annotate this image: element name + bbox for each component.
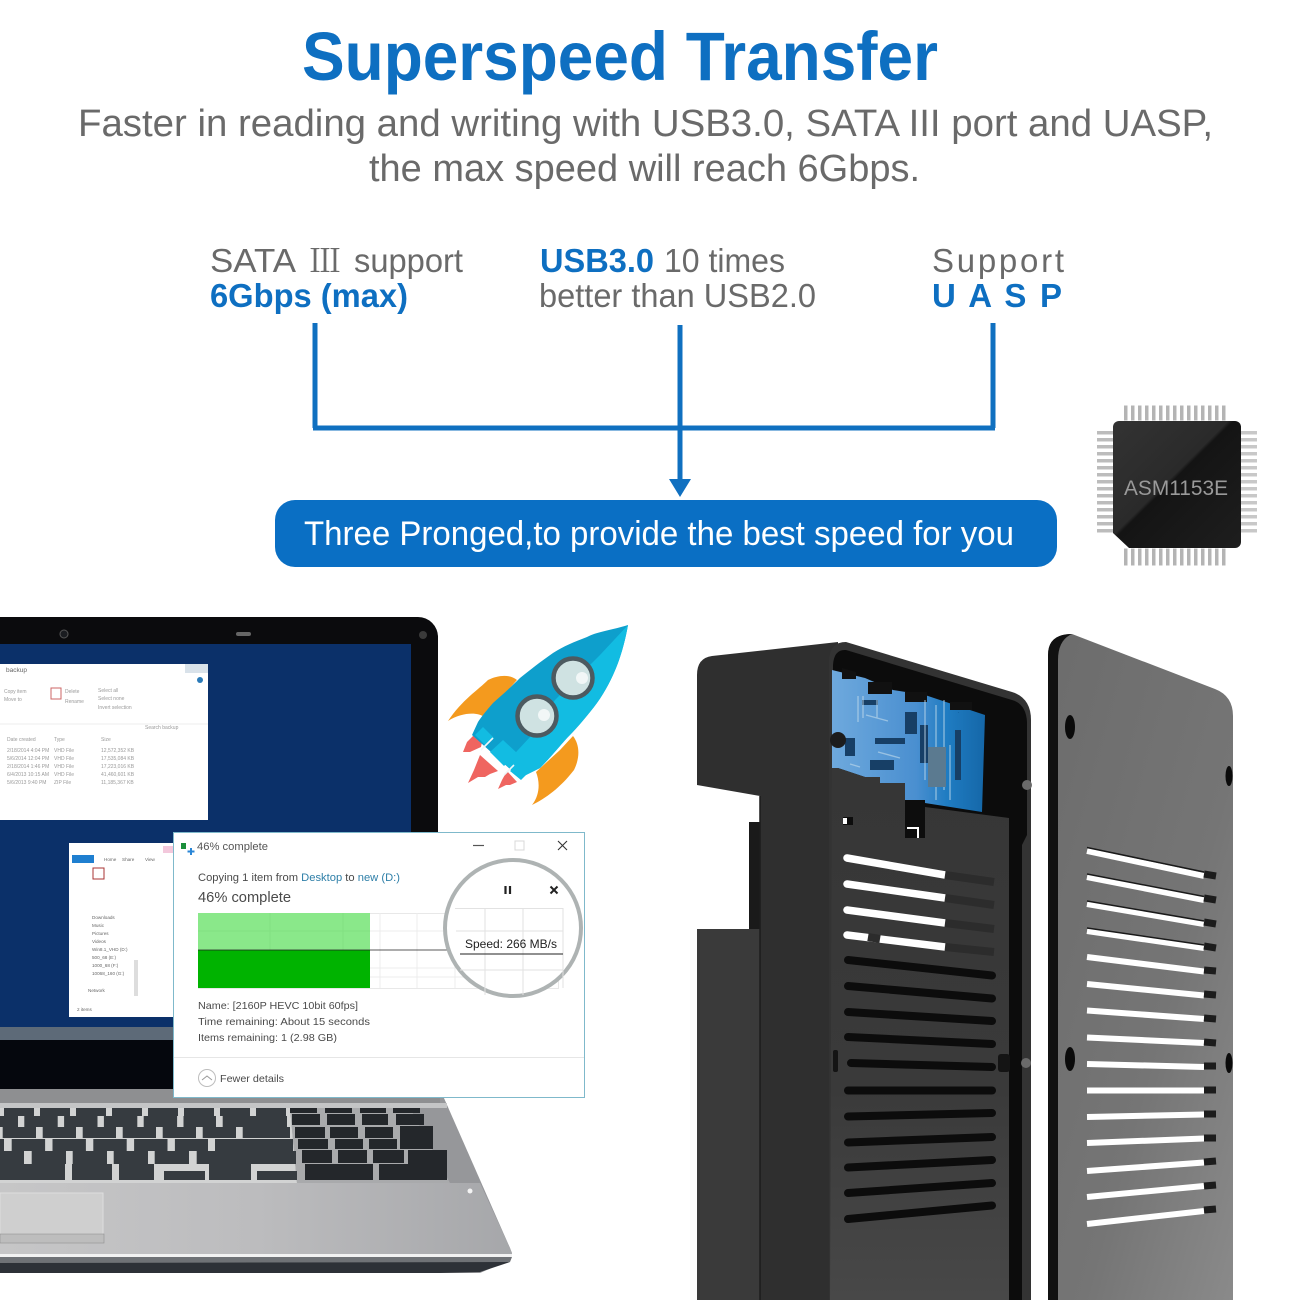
left fin	[448, 676, 517, 721]
file window: backup: 11,185,367 KB	[101, 780, 134, 786]
speed chart	[198, 913, 560, 988]
subtitle: Faster in reading and writing with USB3.0, SATA III port and UASP,	[78, 103, 1213, 145]
file window: backup: Date created	[7, 737, 36, 743]
file window: backup: Select all	[98, 688, 118, 694]
file window: backup: Search backup	[145, 725, 179, 731]
file window: drive list	[69, 843, 174, 1017]
file window: backup: 17,223,016 KB	[101, 764, 135, 770]
dialog status text: Copying 1 item from Desktop to new (D:)	[198, 872, 400, 884]
dialog title bar	[181, 841, 567, 855]
file window: backup: Rename	[65, 699, 84, 705]
file window: backup: Invert selection	[98, 705, 132, 711]
file window: backup: 17,535,084 KB	[101, 756, 135, 762]
file window: drive list: Videos	[92, 939, 107, 944]
laptop touchpad	[0, 1193, 104, 1243]
file window: drive list: 2 items	[77, 1007, 93, 1012]
file window: drive list: View	[145, 857, 156, 862]
file window: drive list: 1000_68 (F:)	[92, 963, 119, 968]
sliding inner panel	[830, 768, 1009, 1300]
callout banner	[275, 500, 1057, 567]
file window: drive list: Home	[104, 857, 117, 862]
file window: drive list: Win8.1_VHD (D:)	[92, 947, 128, 952]
transfer details: Items remaining: 1 (2.98 GB)	[198, 1032, 337, 1044]
subtitle: the max speed will reach 6Gbps.	[369, 148, 920, 190]
laptop numeric keypad	[290, 1108, 447, 1180]
file window: backup: ZIP File	[54, 780, 71, 786]
file window: backup: 5/6/2014 12:04 PM	[7, 756, 49, 762]
fewer details control: Fewer details	[220, 1073, 284, 1085]
feature: SATA III support	[210, 236, 463, 314]
rocket body	[472, 625, 628, 778]
icon: rocket	[448, 625, 628, 805]
file window: backup: VHD File	[54, 748, 74, 754]
icon: ASM1153E chip: ASM1153E	[1124, 476, 1228, 500]
file window: backup: 41,460,601 KB	[101, 772, 135, 778]
file window: drive list: 10068_160 (G:)	[92, 971, 125, 976]
transfer details	[198, 1000, 370, 1044]
file window: backup: Copy item	[4, 689, 27, 695]
feature: UASP support: U A S P	[932, 277, 1062, 314]
subtitle	[78, 103, 1213, 190]
housing frame	[829, 642, 1031, 1300]
file window: backup: 2/18/2014 4:04 PM	[7, 748, 49, 754]
file window: drive list: Share	[122, 857, 135, 862]
feature: USB3.0 speed: better than USB2.0	[539, 277, 816, 314]
file window: drive list: Pictures	[92, 931, 109, 936]
plate screw holes	[1065, 715, 1232, 1073]
right fin	[532, 736, 578, 805]
feature: USB3.0 speed: USB3.0	[540, 242, 654, 279]
flames	[463, 735, 517, 789]
plate vent slots	[1087, 848, 1216, 1224]
dialog status text	[198, 872, 400, 906]
front vent slots	[847, 858, 994, 1219]
file window: backup: Move to	[4, 697, 22, 703]
file window: backup: backup	[6, 667, 27, 674]
copy progress dialog	[174, 832, 584, 1098]
file window: backup: VHD File	[54, 772, 74, 778]
file window: backup: Select none	[98, 696, 125, 702]
transfer details: Time remaining: About 15 seconds	[198, 1016, 370, 1028]
file window: backup: Type	[54, 737, 65, 743]
file window: drive list: Downloads	[92, 915, 115, 920]
feature: UASP support	[932, 242, 1064, 314]
callout banner: Three Pronged,to provide the best speed for you	[304, 515, 1014, 553]
enclosure back plate	[1048, 634, 1233, 1300]
dialog title bar: 46% complete	[197, 841, 268, 853]
file window: backup: 6/4/2013 10:15 AM	[7, 772, 49, 778]
file window: drive list: Music	[92, 923, 105, 928]
feature: UASP support: Support	[932, 242, 1064, 279]
laptop screen	[0, 644, 411, 1027]
laptop keyboard deck	[0, 1089, 512, 1273]
laptop keys	[0, 1112, 297, 1176]
feature: SATA III support: SATA	[210, 242, 296, 279]
file window: drive list: 500_68 (E:)	[92, 955, 116, 960]
laptop lid	[0, 617, 438, 1100]
file window: backup: 12,572,352 KB	[101, 748, 135, 754]
feature: SATA III support: 6Gbps (max)	[210, 277, 408, 314]
transfer details: Name: [2160P HEVC 10bit 60fps]	[198, 1000, 358, 1012]
enclosure housing	[697, 642, 1032, 1300]
file window: backup: Delete	[65, 689, 80, 695]
feature: SATA III support: support	[354, 242, 463, 279]
dialog status text: 46% complete	[198, 890, 291, 906]
magnifier: speed readout	[445, 860, 581, 996]
feature: USB3.0 speed: 10 times	[664, 242, 785, 279]
file window: backup: Size	[101, 737, 111, 743]
housing side	[697, 642, 838, 1300]
rocket windows	[518, 658, 592, 736]
file window: backup: 5/6/2013 9:40 PM	[7, 780, 46, 786]
magnifier: speed readout: Speed: 266 MB/s	[465, 937, 557, 951]
file window: backup: VHD File	[54, 756, 74, 762]
file window: backup: 2/18/2014 1:46 PM	[7, 764, 49, 770]
icon: ASM1153E chip	[1105, 413, 1249, 557]
feature: USB3.0 speed	[539, 242, 816, 314]
laptop	[0, 617, 512, 1273]
fewer details control	[198, 1070, 284, 1086]
file window: backup	[0, 664, 208, 820]
circuit board	[830, 668, 985, 812]
title: Superspeed Transfer	[302, 18, 938, 95]
file window: backup: VHD File	[54, 764, 74, 770]
file window: drive list: Network	[88, 988, 106, 993]
feature: SATA III support: Ⅲ	[309, 236, 341, 282]
connector arrow	[313, 323, 995, 497]
